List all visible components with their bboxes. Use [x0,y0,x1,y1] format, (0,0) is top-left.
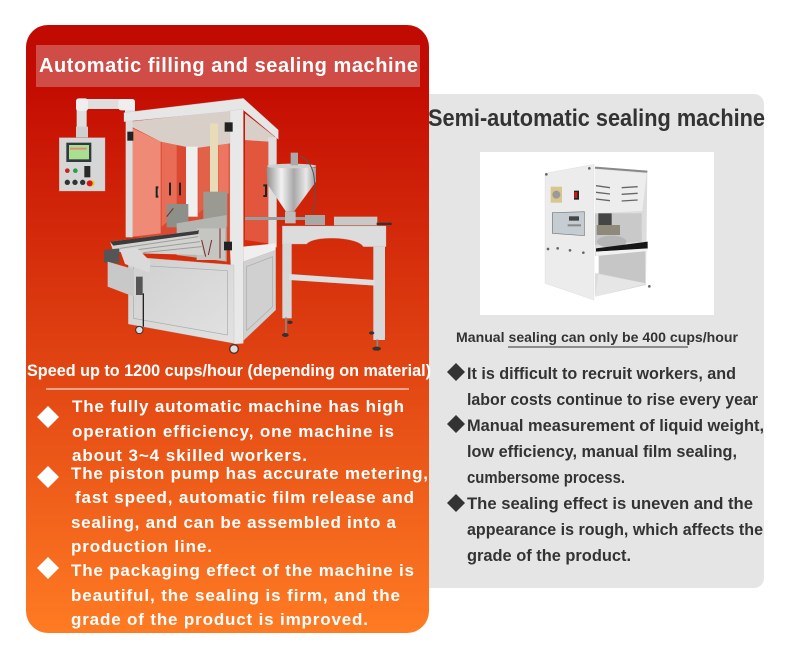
heading: automatic filling and sealing machine [36,45,420,87]
bullet: piston pump [37,464,428,556]
bullet: packaging effect: beautiful, the sealing is firm, and the [71,586,400,605]
bullet: manual process: cumbersome process. [467,469,625,487]
bullet: piston pump: fast speed, automatic film release and [75,488,414,507]
bullet: sealing effect: appearance is rough, which affects the [467,521,763,539]
bullet: manual process: Manual measurement of liquid weight, [467,417,764,435]
bullet: sealing effect: The sealing effect is uneven and the [467,495,753,513]
bullet: sealing effect [447,494,763,565]
table [282,226,386,247]
bullet: manual process: low efficiency, manual film sealing, [467,443,737,461]
bullet: labor cost: It is difficult to recruit workers, and [467,365,736,383]
caption: manual sealing speed: Manual sealing can only be 400 cups/hour [456,329,739,345]
panel: semi-automatic sealing machine [420,94,765,588]
image: semi-automatic sealing machine [480,152,714,315]
bullet: efficiency [37,397,404,465]
conveyor [110,231,203,255]
bullet: efficiency: The fully automatic machine has high [72,397,404,416]
bullet: manual process [447,415,764,487]
bullet: piston pump: production line. [71,537,212,556]
hopper [267,167,316,212]
frame [124,98,278,139]
bullet: piston pump: The piston pump has accurate metering, [71,464,428,483]
bullet: efficiency: about 3~4 skilled workers. [72,446,307,465]
bullet: packaging effect: grade of the product is improved. [71,610,368,629]
bullet: labor cost [447,363,759,409]
heading: automatic filling and sealing machine: Automatic filling and sealing machine [39,55,418,77]
heading: semi-automatic sealing machine: Semi-automatic sealing machine [428,105,765,132]
base cabinet [128,257,234,343]
image: automatic filling and sealing machine [59,98,392,353]
bullet: sealing effect: grade of the product. [467,547,631,565]
glass enclosure [130,111,230,247]
bullet: packaging effect: The packaging effect of the machine is [71,561,414,580]
panel: automatic filling and sealing machine [26,25,431,633]
bullet: efficiency: operation efficiency, one machine is [72,422,394,441]
pump cylinder [245,217,325,220]
speed statement: Speed up to 1200 cups/hour (depending on material) [27,361,431,380]
bullet: labor cost: labor costs continue to rise every year [467,391,759,409]
casters [136,326,143,334]
duct arm [82,104,130,137]
bullet: packaging effect [37,557,414,629]
filling mechanism [167,204,188,227]
bullet: piston pump: sealing, and can be assembled into a [71,513,397,532]
control box [59,138,105,191]
